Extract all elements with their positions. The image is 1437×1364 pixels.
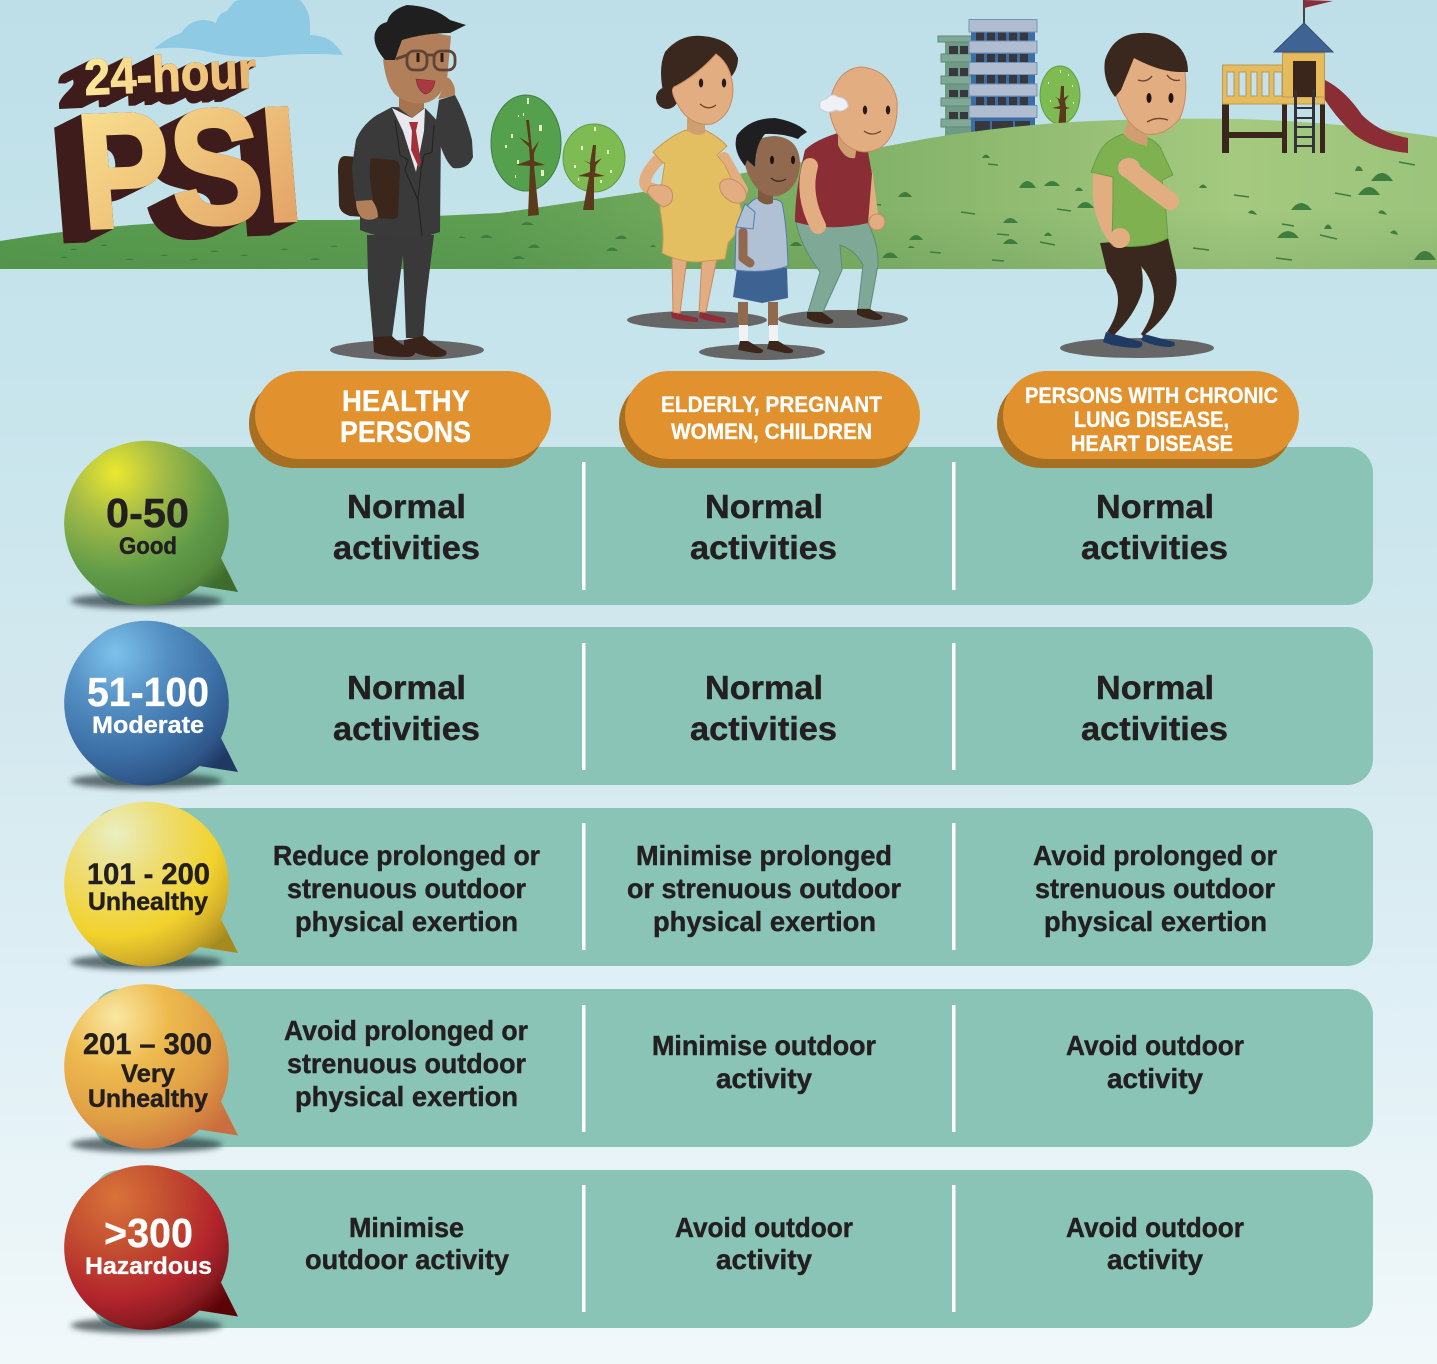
healthy persons advice: activities — [333, 710, 480, 747]
healthy persons advice — [305, 1212, 509, 1275]
chronic illness advice — [1066, 1212, 1244, 1275]
elderly advice — [690, 669, 837, 747]
shoes — [373, 336, 447, 357]
column dividers — [582, 1005, 956, 1132]
row background — [93, 808, 1373, 966]
tree behind hill, right — [1040, 66, 1080, 128]
arms — [645, 158, 742, 192]
bubble: 51-100 Moderate: Moderate — [92, 712, 204, 739]
right arm — [868, 175, 874, 222]
ladder — [1294, 90, 1315, 153]
neck — [687, 118, 705, 135]
legs — [672, 258, 717, 313]
fist — [1118, 158, 1140, 178]
elderly advice: Normal — [705, 488, 823, 525]
elderly advice: activity — [716, 1063, 812, 1094]
trousers — [1100, 238, 1177, 336]
badge: persons with chronic lung disease, heart disease — [997, 371, 1299, 468]
badge: healthy persons: HEALTHY — [342, 385, 470, 418]
hair — [1104, 33, 1188, 97]
head — [829, 67, 897, 152]
elderly advice — [652, 1030, 876, 1094]
roof — [1274, 23, 1333, 52]
elderly advice: Minimise outdoor — [652, 1030, 876, 1061]
shadow — [1060, 338, 1214, 358]
healthy persons advice: Reduce prolonged or — [273, 840, 540, 871]
head — [1116, 58, 1186, 134]
shorts — [733, 268, 788, 303]
healthy persons advice: strenuous outdoor — [287, 1048, 526, 1079]
chronic illness advice — [1033, 840, 1277, 937]
hair — [736, 118, 807, 167]
shirt — [795, 133, 872, 227]
socks — [739, 325, 778, 342]
healthy persons advice: strenuous outdoor — [287, 873, 526, 904]
neck — [838, 135, 858, 158]
elderly advice — [627, 840, 901, 937]
grass tufts — [60, 154, 1436, 260]
bubble: 201-300 Very Unhealthy: 201 – 300 — [83, 1028, 212, 1061]
shoes — [671, 312, 726, 323]
buildings — [938, 20, 1037, 136]
chronic illness advice: activity — [1107, 1063, 1203, 1094]
mouth — [416, 79, 435, 94]
elderly advice — [675, 1212, 853, 1275]
right arm on chest — [1130, 170, 1170, 201]
elderly advice: Normal — [705, 669, 823, 706]
bubble: above 300 Hazardous: >300 — [104, 1210, 193, 1256]
bubble: 201-300 Very Unhealthy: Unhealthy — [88, 1085, 208, 1113]
chronic illness advice: Normal — [1096, 669, 1214, 706]
left sleeve — [352, 115, 381, 201]
shoes — [738, 341, 793, 353]
chronic illness advice: Normal — [1096, 488, 1214, 525]
bubble: above 300 Hazardous: Hazardous — [85, 1253, 212, 1280]
eyes — [699, 78, 703, 88]
bubble: 0-50 Good — [64, 441, 238, 609]
column dividers — [582, 823, 956, 950]
row background — [93, 447, 1373, 605]
smile — [771, 178, 786, 181]
eyes — [1146, 93, 1152, 103]
face — [383, 28, 451, 103]
left arm — [807, 166, 818, 226]
structure legs — [1222, 104, 1325, 153]
eyes — [416, 53, 444, 62]
panel: row 51-100 — [93, 627, 1373, 785]
bubble: 201-300 Very Unhealthy — [64, 984, 238, 1152]
tower — [1282, 53, 1324, 97]
eyes — [863, 106, 867, 114]
elderly advice: activity — [716, 1244, 812, 1275]
hill — [0, 119, 1437, 269]
glasses — [396, 51, 455, 70]
eyes — [770, 156, 774, 164]
column dividers — [582, 462, 956, 590]
healthy persons advice — [333, 669, 480, 747]
title line: PSI: PSI — [71, 72, 308, 263]
trousers — [796, 222, 878, 312]
row background — [93, 989, 1373, 1147]
healthy persons advice: Minimise — [349, 1212, 464, 1243]
shoes — [807, 309, 882, 324]
row background — [93, 627, 1373, 785]
chronic illness advice: activities — [1081, 529, 1228, 566]
hands — [647, 185, 673, 207]
flag — [1303, 0, 1333, 24]
slide — [1325, 80, 1408, 153]
green building — [938, 36, 972, 136]
cloud — [154, 0, 343, 57]
character: boy — [699, 118, 825, 360]
chronic illness advice: Avoid outdoor — [1066, 1030, 1244, 1061]
bubble: 0-50 Good: Good — [119, 533, 177, 560]
shoes — [1103, 332, 1175, 348]
character: pregnant woman — [627, 36, 767, 329]
badge: persons with chronic lung disease, heart disease: PERSONS WITH CHRONIC — [1025, 383, 1278, 408]
badge: elderly, pregnant women, children: WOMEN, CHILDREN — [671, 419, 872, 444]
healthy persons advice: Avoid prolonged or — [284, 1015, 528, 1046]
tie — [409, 122, 421, 168]
legs — [738, 302, 778, 326]
panel: row 0-50 — [93, 447, 1373, 605]
smile — [864, 131, 881, 134]
healthy persons advice: Normal — [347, 488, 466, 525]
bubble: 201-300 Very Unhealthy: Very — [121, 1060, 175, 1088]
elderly advice — [690, 488, 837, 566]
smile — [700, 104, 716, 108]
elderly advice: physical exertion — [653, 906, 876, 937]
shadow — [699, 344, 825, 360]
healthy persons advice — [273, 840, 540, 937]
trees on left hill — [491, 95, 625, 216]
blue building — [969, 20, 1037, 135]
neck — [399, 92, 424, 118]
column dividers — [582, 1185, 956, 1312]
hand — [869, 214, 885, 230]
shirt — [1091, 134, 1173, 246]
bubble: 51-100 Moderate — [64, 621, 238, 789]
chronic illness advice: strenuous outdoor — [1035, 873, 1275, 904]
title: 24-hour PSI — [71, 42, 308, 263]
healthy persons advice — [284, 1015, 528, 1112]
arm — [743, 232, 750, 263]
chronic illness advice — [1066, 1030, 1244, 1094]
jacket body — [352, 107, 441, 239]
healthy persons advice: physical exertion — [295, 906, 518, 937]
badge: persons with chronic lung disease, heart disease: HEART DISEASE — [1071, 431, 1233, 456]
head — [745, 136, 800, 196]
badge: elderly, pregnant women, children: ELDERLY, PREGNANT — [661, 392, 883, 417]
lapels — [395, 120, 434, 236]
title line: 24-hour: 24-hour — [83, 42, 257, 106]
character: businessman on phone — [330, 5, 484, 360]
frown and brows — [1138, 75, 1180, 122]
hand — [1110, 228, 1130, 248]
character: elderly man — [778, 67, 908, 328]
sleeve — [736, 204, 755, 229]
badge: healthy persons: PERSONS — [340, 416, 471, 449]
bubble: 51-100 Moderate: 51-100 — [87, 669, 209, 715]
shirt and collar — [392, 108, 425, 172]
face — [672, 54, 733, 124]
chronic illness advice — [1081, 488, 1228, 566]
shadow — [627, 311, 767, 329]
neck — [758, 186, 773, 204]
chronic illness advice — [1081, 669, 1228, 747]
elderly advice: activities — [690, 529, 837, 566]
playground — [1222, 0, 1408, 153]
tree large — [491, 95, 561, 216]
hair — [374, 5, 466, 60]
shirt — [735, 198, 788, 271]
elderly advice: or strenuous outdoor — [627, 873, 901, 904]
healthy persons advice: physical exertion — [295, 1081, 518, 1112]
badge: healthy persons — [249, 371, 551, 468]
chronic illness advice: physical exertion — [1044, 906, 1267, 937]
white hair — [820, 95, 848, 112]
platform — [1222, 65, 1324, 104]
shadow — [778, 310, 908, 328]
elderly advice: Avoid outdoor — [675, 1212, 853, 1243]
healthy persons advice: Normal — [347, 669, 466, 706]
chronic illness advice: activities — [1081, 710, 1228, 747]
healthy persons advice: activities — [333, 529, 480, 566]
bubble: 0-50 Good: 0-50 — [106, 490, 189, 536]
panel: row above 300 — [93, 1170, 1373, 1328]
bubble: 101-200 Unhealthy: 101 - 200 — [87, 858, 210, 891]
panel: row 101-200 — [93, 808, 1373, 966]
bubble: 101-200 Unhealthy: Unhealthy — [88, 888, 208, 916]
neck — [1123, 122, 1148, 146]
healthy persons advice — [333, 488, 480, 566]
dress — [653, 130, 742, 262]
row background — [93, 1170, 1373, 1328]
left arm — [1103, 176, 1119, 238]
character: person with chronic illness — [1060, 33, 1214, 358]
badge: elderly, pregnant women, children — [619, 371, 920, 468]
chronic illness advice: Avoid outdoor — [1066, 1212, 1244, 1243]
badge: persons with chronic lung disease, heart disease: LUNG DISEASE, — [1074, 407, 1229, 432]
folder — [338, 156, 400, 219]
shadow — [330, 340, 484, 360]
hand at ear — [438, 78, 455, 99]
raised arm — [435, 95, 473, 168]
hair and bun — [656, 36, 738, 109]
elderly advice: Minimise prolonged — [636, 840, 892, 871]
tree small — [563, 124, 625, 210]
bubble: 101-200 Unhealthy — [64, 802, 238, 970]
trousers — [367, 235, 434, 338]
healthy persons advice: outdoor activity — [305, 1244, 509, 1275]
column dividers — [582, 643, 956, 770]
chronic illness advice: Avoid prolonged or — [1033, 840, 1277, 871]
chronic illness advice: activity — [1107, 1244, 1203, 1275]
hand on folder — [356, 200, 378, 220]
elderly advice: activities — [690, 710, 837, 747]
bubble: above 300 Hazardous — [64, 1165, 238, 1334]
panel: row 201-300 — [93, 989, 1373, 1147]
